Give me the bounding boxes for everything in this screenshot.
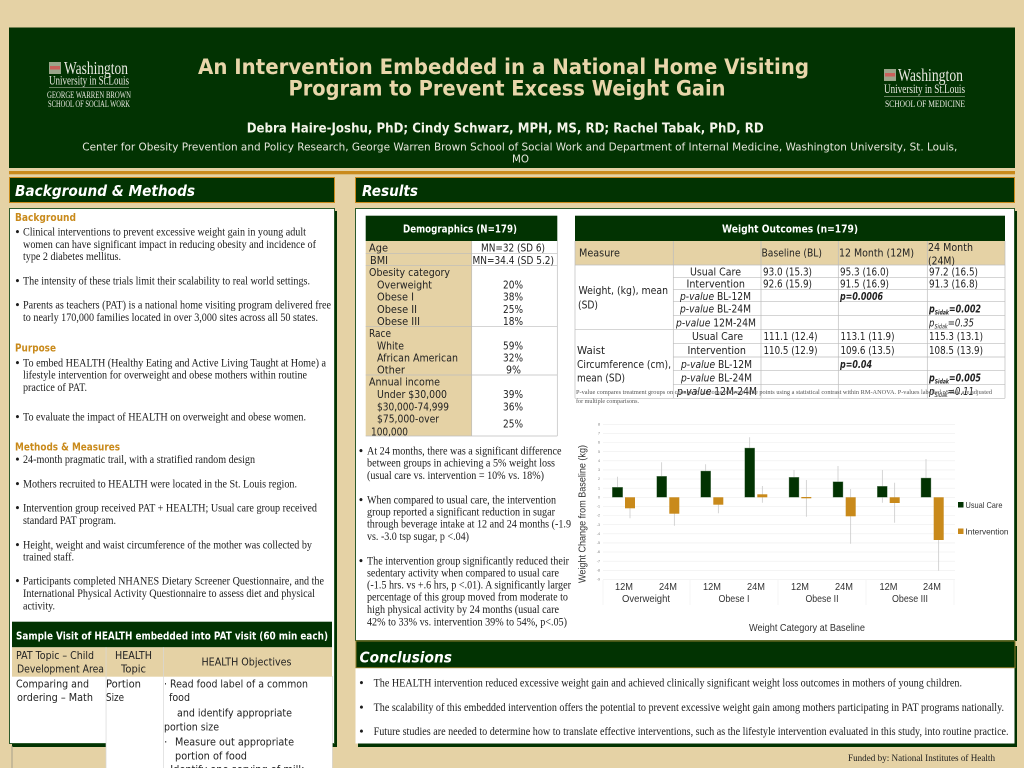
text block: results bullets: [359, 445, 571, 628]
affiliation: [82, 140, 957, 165]
text block: background: [15, 212, 331, 324]
text block: results bullets: The intervention group significantly reduced their: [367, 555, 569, 567]
title: An Intervention Embedded in a National Home Visiting: [198, 55, 809, 80]
table: weight outcomes: =0.002: [949, 303, 981, 315]
table: weight outcomes: p=0.04: [839, 359, 872, 371]
text block: methods and measures: Mothers recruited to HEALTH were located in the St. Louis region.: [23, 478, 297, 490]
table: demographics: Age: [369, 243, 388, 255]
table: demographics: [366, 216, 557, 438]
x axis labels: 24M: [835, 582, 853, 593]
x axis labels: Obese II: [806, 594, 838, 605]
table: weight outcomes: (24M): [928, 255, 955, 267]
text block: background: women can have significant impact in reducing obesity and incidence of: [23, 239, 316, 251]
table: weight outcomes: Intervention: [688, 345, 746, 357]
table: sample visit: Topic: [120, 664, 146, 676]
x axis labels: [615, 582, 941, 605]
text block: purpose: •: [16, 412, 20, 424]
table: weight outcomes: 92.6 (15.9): [763, 279, 812, 291]
table: sample visit: portion size: [164, 721, 219, 733]
panel: background and methods: [10, 208, 337, 768]
text block: purpose: [15, 343, 326, 424]
footnote: for multiple comparisons.: [576, 398, 639, 405]
y axis tick labels: 0: [598, 496, 600, 500]
logo: Washington University George Warren Brown School of Social Work: GEORGE WARREN BROWN: [47, 91, 131, 101]
text block: results bullets: percentage of this group moved from moderate to: [367, 592, 568, 604]
text block: results bullets: through beverage intake at 12 and 24 months (-1.9: [367, 519, 571, 531]
section header: Background & Methods: Background & Methods: [15, 182, 195, 200]
y axis tick labels: -2: [597, 514, 600, 518]
table: sample visit: Measure out appropriate: [175, 737, 294, 749]
table: demographics: Under $30,000: [377, 389, 447, 401]
table: demographics: Overweight: [377, 279, 432, 291]
panel: conclusions: [356, 641, 1017, 747]
text block: results bullets: vs. -3.0 tsp sugar, p <.04): [367, 531, 469, 543]
x axis labels: 12M: [615, 582, 633, 593]
table: demographics: 9%: [506, 365, 521, 377]
table: demographics: Race: [369, 328, 391, 340]
text block: methods and measures: standard PAT program.: [23, 515, 116, 527]
text block: methods and measures: Intervention group received PAT + HEALTH; Usual care group received: [23, 503, 317, 515]
text block: background: Background: [15, 212, 76, 224]
text block: conclusions: •: [360, 678, 364, 690]
text block: results bullets: At 24 months, there was a significant difference: [367, 445, 562, 457]
text block: methods and measures: •: [16, 539, 20, 551]
x axis labels: 12M: [880, 582, 898, 593]
x axis labels: 24M: [747, 582, 765, 593]
logo: Washington University School of Medicine: Washington: [898, 65, 963, 85]
table: weight outcomes: p: [929, 373, 937, 385]
legend: Usual Care: [966, 500, 1003, 510]
y axis tick labels: -7: [597, 559, 600, 563]
y axis tick labels: 6: [598, 441, 600, 445]
text block: methods and measures: 24-month pragmatic trail, with a stratified random design: [23, 454, 255, 466]
table: sample visit: Size: [106, 692, 124, 704]
y axis tick labels: -5: [597, 541, 600, 545]
text block: purpose: •: [16, 358, 20, 370]
table: weight outcomes: Weight Outcomes (n=179): [722, 223, 858, 235]
x axis labels: 24M: [923, 582, 941, 593]
table: sample visit: PAT Topic – Child: [16, 650, 94, 662]
table: sample visit: HEALTH: [115, 650, 152, 662]
text block: results bullets: high physical activity by 24 months (usual care: [367, 604, 559, 616]
y axis tick labels: -1: [597, 505, 600, 509]
table: demographics: 18%: [503, 316, 523, 328]
logo: Washington University George Warren Brown School of Social Work: University in St.Louis: [49, 72, 129, 88]
text block: background: to nearly 170,000 families located in over 3,000 sites across all 50 states.: [23, 312, 318, 324]
logo: Washington University School of Medicine: [884, 65, 965, 110]
footnote: P-value compares treatment groups on change in outcome between time points using a statistical contrast within RM-ANOVA. P-values labelled pSidak are adjusted: [576, 389, 993, 396]
text block: background: type 2 diabetes mellitus.: [23, 251, 121, 263]
table: demographics: 36%: [503, 401, 523, 413]
affiliation: MO: [512, 152, 529, 165]
table: weight outcomes: Sidak: [934, 392, 948, 399]
x axis labels: 12M: [703, 582, 721, 593]
text block: methods and measures: •: [16, 503, 20, 515]
table: weight outcomes: p-value 12M-24M: [675, 318, 756, 330]
text block: results bullets: •: [359, 494, 363, 506]
y axis tick labels: 1: [598, 486, 600, 490]
text block: background: •: [16, 275, 20, 287]
x axis labels: Overweight: [622, 594, 670, 605]
table: weight outcomes: 113.1 (11.9): [840, 331, 894, 343]
text block: background: •: [16, 227, 20, 239]
y axis title: Weight Change from Baseline (kg): [578, 445, 588, 583]
title: Program to Prevent Excess Weight Gain: [288, 77, 726, 102]
table: weight outcomes: p-value BL-24M: [679, 303, 751, 315]
text block: results bullets: (-1.5 hrs. vs +.6 hrs, p <.01). A significantly larger: [367, 580, 571, 592]
text block: conclusions: [360, 678, 1009, 738]
x axis title: Weight Category at Baseline: [749, 623, 866, 634]
text block: methods and measures: [15, 442, 324, 612]
logo: Washington University George Warren Brown School of Social Work: Washington: [64, 58, 128, 78]
series: intervention bars: [625, 494, 944, 540]
table: demographics: 25%: [503, 419, 523, 431]
table: sample visit: ordering – Math: [17, 692, 93, 704]
y axis tick labels: -4: [597, 532, 600, 536]
table: weight outcomes: 110.5 (12.9): [764, 345, 818, 357]
table: demographics: Obese II: [377, 304, 417, 316]
table: weight outcomes: =0.005: [949, 373, 981, 385]
text block: purpose: To evaluate the impact of HEALTH on overweight and obese women.: [23, 412, 306, 424]
table: weight outcomes: p=0.0006: [839, 291, 883, 303]
table: weight outcomes: 91.3 (16.8): [929, 279, 978, 291]
y axis tick labels: 7: [598, 432, 600, 436]
text block: purpose: To embed HEALTH (Healthy Eating and Active Living Taught at Home) a: [23, 358, 326, 370]
section header: Background & Methods: [10, 178, 334, 202]
section header: conclusions: Conclusions: [360, 648, 452, 666]
table: sample visit: ·: [164, 737, 167, 749]
table: sample visit: and identify appropriate: [177, 708, 292, 720]
table: weight outcomes: Sidak: [935, 309, 950, 316]
text block: methods and measures: activity.: [23, 600, 55, 612]
table: sample visit: Comparing and: [16, 678, 89, 690]
text block: conclusions: •: [360, 726, 364, 738]
table: sample visit: Development Area: [17, 664, 104, 676]
y axis tick labels: -3: [597, 523, 600, 527]
table: sample visit: [12, 622, 333, 768]
table: demographics: 38%: [503, 292, 523, 304]
table: sample visit: food: [169, 692, 190, 704]
table: demographics: Obese III: [377, 316, 420, 328]
table: weight outcomes: Measure: [579, 248, 620, 260]
table: weight outcomes: Usual Care: [690, 267, 741, 279]
y axis tick labels: 5: [598, 450, 600, 454]
table: weight outcomes: Circumference (cm),: [577, 359, 671, 371]
table: weight outcomes: 115.3 (13.1): [929, 331, 983, 343]
table: weight outcomes: 108.5 (13.9): [929, 345, 983, 357]
logo: Washington University George Warren Brown School of Social Work: SCHOOL OF SOCIAL WORK: [48, 100, 130, 110]
table: weight outcomes: 95.3 (16.0): [840, 267, 889, 279]
table: weight outcomes: Waist: [577, 345, 605, 357]
table: demographics: 59%: [503, 340, 523, 352]
text block: conclusions: The HEALTH intervention reduced excessive weight gain and achieved clinically significant weight loss outcomes in mothers of young children.: [374, 678, 962, 690]
text block: results bullets: When compared to usual care, the intervention: [367, 494, 556, 506]
table: weight outcomes: 97.2 (16.5): [929, 267, 978, 279]
table: demographics: 100,000: [371, 426, 408, 438]
text block: results bullets: between groups in achieving a 5% weight loss: [367, 458, 555, 470]
header banner: [9, 28, 1015, 168]
title: [198, 55, 809, 102]
table: weight outcomes: 24 Month: [928, 242, 973, 254]
panel: results: [356, 208, 1017, 641]
y axis tick labels: 3: [598, 468, 600, 472]
x axis labels: 24M: [659, 582, 677, 593]
table: weight outcomes: Sidak: [935, 379, 950, 386]
table: weight outcomes: p-value 12M-24M: [676, 386, 757, 398]
text block: results bullets: •: [359, 555, 363, 567]
table: weight outcomes: (SD): [578, 299, 598, 311]
table: weight outcomes: 12 Month (12M): [839, 248, 914, 260]
text block: methods and measures: Participants completed NHANES Dietary Screener Questionnaire, and the: [23, 576, 324, 588]
table: weight outcomes: Sidak: [934, 324, 948, 331]
text block: methods and measures: •: [16, 478, 20, 490]
table: demographics: Obese I: [377, 292, 414, 304]
y axis tick labels: 2: [598, 477, 600, 481]
text block: results bullets: sedentary activity when compared to usual care: [367, 568, 559, 580]
section header: Results: Results: [362, 182, 418, 200]
table: demographics: 20%: [503, 279, 523, 291]
table: weight outcomes: 93.0 (15.3): [763, 267, 812, 279]
text block: purpose: lifestyle intervention for overweight and obese mothers within routine: [23, 370, 307, 382]
text block: background: Clinical interventions to prevent excessive weight gain in young adult: [23, 227, 307, 239]
x axis labels: Obese I: [718, 594, 750, 605]
text block: conclusions: •: [360, 702, 364, 714]
bar chart: weight change from baseline: [578, 422, 1009, 634]
table: weight outcomes: p-value BL-12M: [679, 291, 751, 303]
y axis tick labels: -9: [597, 578, 600, 582]
authors: Debra Haire-Joshu, PhD; Cindy Schwarz, MPH, MS, RD; Rachel Tabak, PhD, RD: [247, 122, 764, 137]
y axis tick labels: 4: [598, 459, 600, 463]
text block: purpose: Purpose: [15, 343, 56, 355]
logo: Washington University School of Medicine: University in St.Louis: [884, 81, 965, 96]
table: demographics: White: [377, 340, 404, 352]
table: weight outcomes: Intervention: [686, 279, 745, 291]
table: demographics: Demographics (N=179): [403, 223, 517, 235]
text block: purpose: practice of PAT.: [23, 382, 87, 394]
table: weight outcomes: mean (SD): [577, 373, 625, 385]
table: demographics: BMI: [370, 255, 388, 267]
table: weight outcomes: p: [929, 318, 936, 330]
text block: methods and measures: Height, weight and waist circumference of the mother was collected by: [23, 539, 312, 551]
table: demographics: 39%: [503, 389, 523, 401]
series: usual care bars: [612, 448, 931, 497]
table: demographics: $75,000-over: [377, 413, 440, 425]
table: demographics: Annual income: [369, 377, 440, 389]
table: weight outcomes: =0.11: [948, 386, 974, 398]
table: demographics: MN=32 (SD 6): [481, 243, 545, 255]
table: weight outcomes: =0.35: [948, 318, 974, 330]
table: weight outcomes: p-value BL-24M: [680, 373, 752, 385]
table: sample visit: Portion: [106, 678, 141, 690]
legend: Intervention: [966, 526, 1009, 536]
y axis tick labels: [597, 422, 600, 582]
table: sample visit: · Read food label of a common: [164, 678, 308, 690]
text block: results bullets: group reported a significant reduction in sugar: [367, 507, 555, 519]
y axis tick labels: 8: [598, 422, 600, 426]
section header: Results: [356, 178, 1014, 202]
text block: background: The intensity of these trials limit their scalability to real world settings.: [23, 275, 310, 287]
text block: background: •: [16, 300, 20, 312]
table: weight outcomes: p-value BL-12M: [680, 359, 752, 371]
table: weight outcomes: p: [929, 386, 936, 398]
y axis tick labels: -8: [597, 568, 600, 572]
text block: methods and measures: •: [16, 576, 20, 588]
text block: results bullets: (usual care vs. intervention = 10% vs. 18%): [367, 470, 544, 482]
affiliation: Center for Obesity Prevention and Policy Research, George Warren Brown School of Social Work and Department of Internal Medicine, Washington University, St. Louis,: [82, 140, 957, 153]
text block: results bullets: •: [359, 445, 363, 457]
section header: conclusions: [356, 641, 1015, 668]
table: demographics: 32%: [503, 353, 523, 365]
x axis labels: 12M: [791, 582, 809, 593]
table: weight outcomes: [575, 216, 1005, 399]
table: weight outcomes: 109.6 (13.5): [840, 345, 894, 357]
table: demographics: $30,000-74,999: [377, 401, 449, 413]
table: demographics: 25%: [503, 304, 523, 316]
table: sample visit: portion of food: [175, 750, 247, 762]
table: weight outcomes: Baseline (BL): [762, 248, 822, 260]
table: demographics: Other: [377, 365, 406, 377]
text block: methods and measures: Methods & Measures: [15, 442, 120, 454]
error bars: [618, 437, 939, 571]
text block: background: Parents as teachers (PAT) is a national home visiting program delivered free: [23, 300, 331, 312]
table: weight outcomes: Weight, (kg), mean: [578, 285, 668, 297]
table: weight outcomes: Usual Care: [692, 331, 743, 343]
table: sample visit: HEALTH Objectives: [202, 657, 292, 669]
logo: Washington University George Warren Brown School of Social Work: [47, 58, 131, 110]
funding note: Funded by: National Institutes of Health: [848, 753, 995, 764]
table: sample visit: Sample Visit of HEALTH embedded into PAT visit (60 min each): [16, 629, 328, 642]
table: weight outcomes: 111.1 (12.4): [764, 331, 818, 343]
text block: methods and measures: trained staff.: [23, 551, 74, 563]
table: demographics: MN=34.4 (SD 5.2): [472, 255, 554, 267]
table: weight outcomes: 91.5 (16.9): [840, 279, 889, 291]
text block: methods and measures: •: [16, 454, 20, 466]
legend: [958, 500, 1009, 536]
logo: Washington University School of Medicine: SCHOOL OF MEDICINE: [885, 100, 965, 110]
table: weight outcomes: p: [929, 303, 937, 315]
y axis tick labels: -6: [597, 550, 600, 554]
table: demographics: Obesity category: [369, 267, 450, 279]
footnote: [576, 389, 993, 405]
table: demographics: African American: [377, 353, 458, 365]
text block: methods and measures: International Physical Activity Questionnaire to assess diet and physical: [23, 588, 315, 600]
x axis labels: Obese III: [892, 594, 928, 605]
text block: results bullets: 42% to 33% vs. intervention 39% to 54%, p<.05): [367, 616, 567, 628]
